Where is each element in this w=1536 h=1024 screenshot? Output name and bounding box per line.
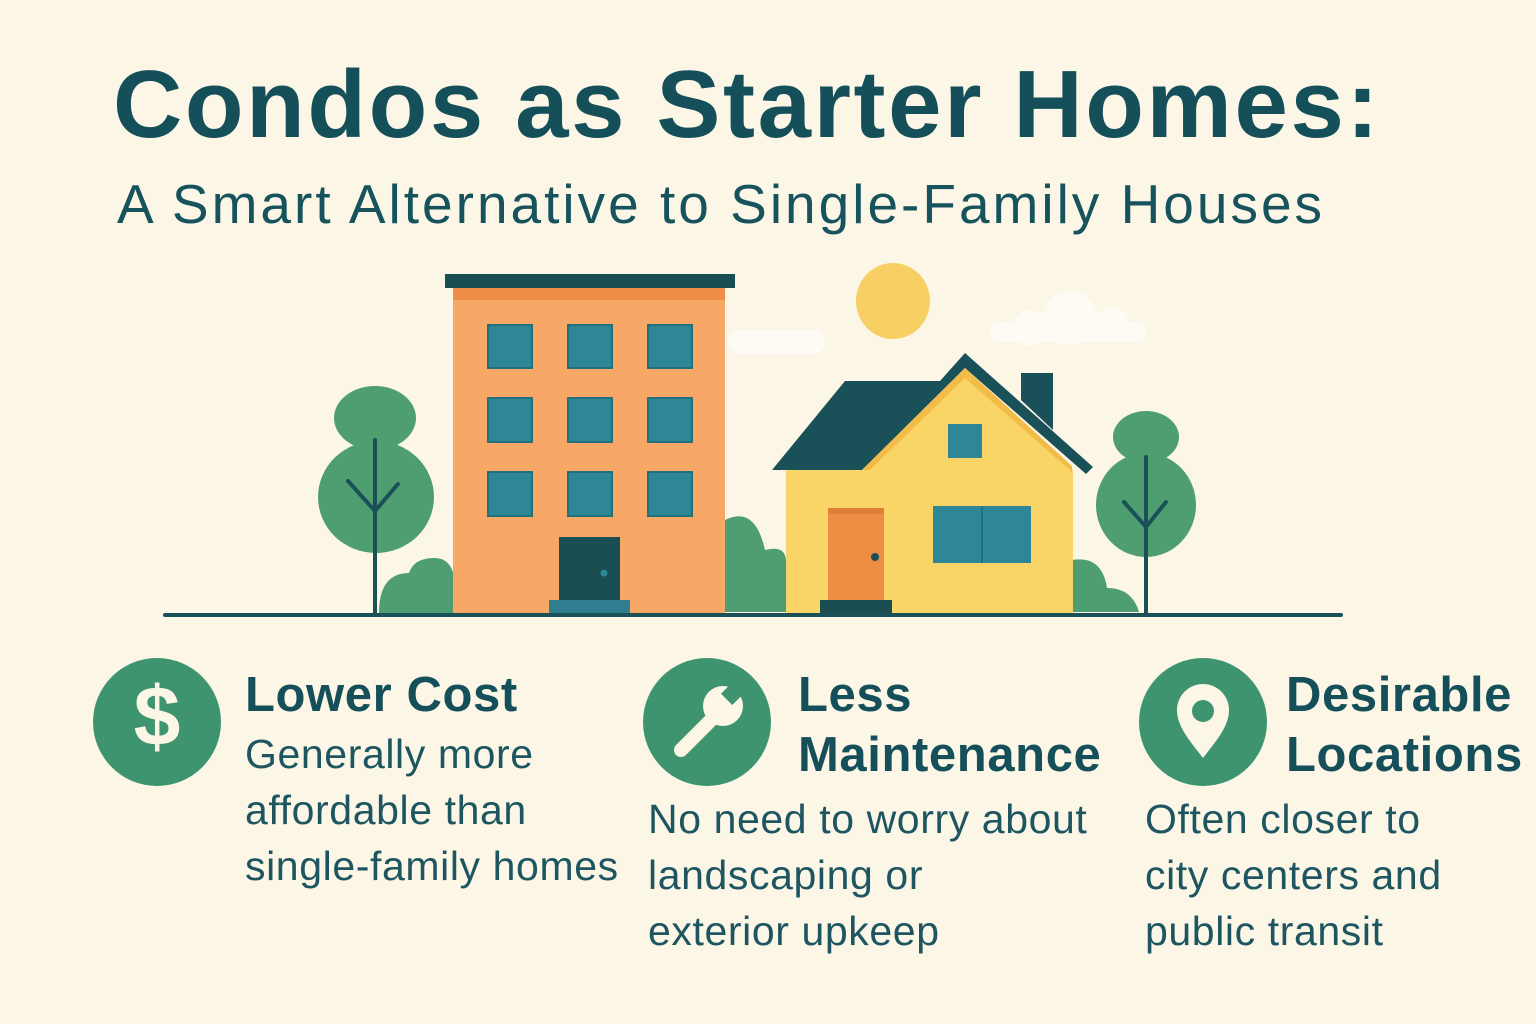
body — [245, 731, 619, 889]
house — [772, 353, 1093, 613]
condo building — [445, 274, 735, 613]
body: single-family homes — [245, 843, 619, 889]
body: city centers and — [1145, 852, 1442, 898]
sun — [856, 263, 930, 339]
icon: wrench — [643, 658, 771, 786]
heading: Desirable — [1286, 668, 1512, 722]
body: exterior upkeep — [648, 908, 940, 954]
body: landscaping or — [648, 852, 923, 898]
body: Often closer to — [1145, 796, 1421, 842]
body: No need to worry about — [648, 796, 1087, 842]
heading: Maintenance — [798, 728, 1101, 782]
heading: lower cost: Lower Cost — [245, 668, 518, 722]
heading: Less — [798, 668, 912, 722]
feature: less maintenance — [643, 658, 1101, 954]
tree left — [318, 386, 434, 613]
title: Condos as Starter Homes: — [113, 51, 1381, 158]
ground line — [163, 613, 1343, 617]
icon: location pin — [1139, 658, 1267, 786]
body — [648, 796, 1087, 954]
body — [1145, 796, 1442, 954]
bushes — [379, 516, 1139, 613]
cloud — [990, 291, 1146, 346]
tree right — [1096, 411, 1196, 613]
feature: lower cost — [93, 658, 619, 889]
heading: Locations — [1286, 728, 1523, 782]
body: Generally more — [245, 731, 534, 777]
heading — [798, 668, 1101, 782]
heading — [1286, 668, 1523, 782]
body: public transit — [1145, 908, 1384, 954]
body: affordable than — [245, 787, 527, 833]
feature: desirable locations — [1139, 658, 1523, 954]
icon: dollar: $ — [134, 669, 180, 763]
illustration: condo and house — [163, 263, 1343, 617]
icon: dollar — [93, 658, 221, 786]
subtitle: A Smart Alternative to Single-Family Houses — [117, 173, 1325, 235]
cloud small — [728, 330, 825, 354]
